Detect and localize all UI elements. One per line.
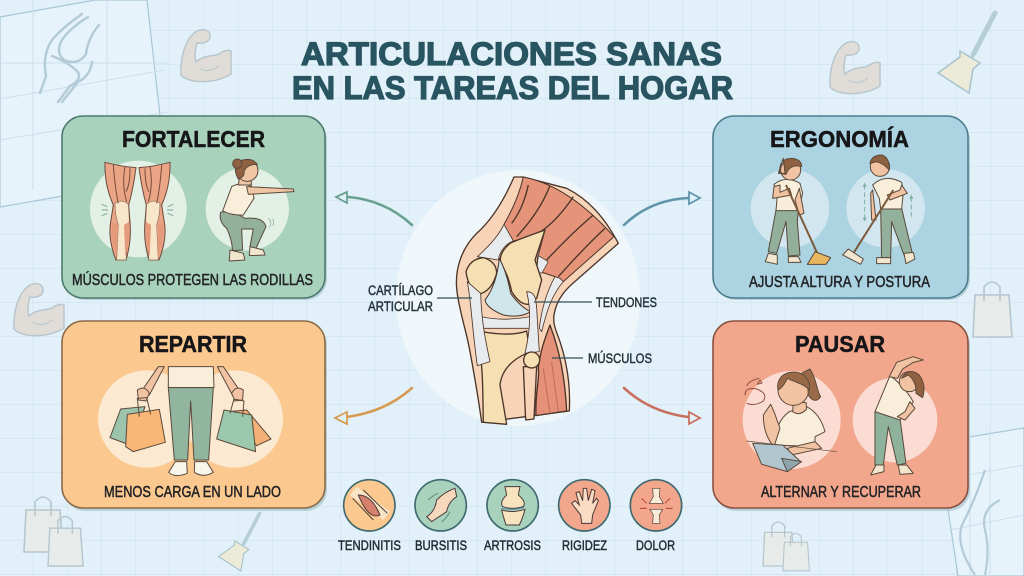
- label: BURSITIS: [415, 538, 467, 553]
- arrow: to fortalecer: [336, 192, 412, 225]
- illustration: person at laptop: [743, 369, 841, 472]
- circle backdrop: [396, 170, 640, 426]
- icon: muscle top right: [830, 42, 880, 94]
- heading: ERGONOMÍA: [770, 125, 909, 152]
- label: RIGIDEZ: [562, 538, 607, 553]
- illustration: squat: [206, 159, 294, 261]
- label: tendones: TENDONES: [596, 295, 657, 310]
- caption: ALTERNAR Y RECUPERAR: [761, 484, 921, 501]
- heading: PAUSAR: [795, 331, 885, 357]
- label: cartilago articular: ARTICULAR: [368, 299, 433, 314]
- icon: tendinitis: [344, 480, 395, 531]
- illustration: person sweeping angled: [843, 155, 925, 264]
- title: EN LAS TAREAS DEL HOGAR: [292, 70, 733, 106]
- caption: MENOS CARGA EN UN LADO: [104, 484, 281, 501]
- label: cartilago articular: [368, 283, 433, 314]
- label: ARTROSIS: [484, 538, 541, 553]
- icon: bags bottom left: [24, 497, 83, 566]
- label: DOLOR: [636, 538, 675, 553]
- panel: ergonomia: [713, 116, 970, 300]
- icon: broom top right: [938, 13, 995, 93]
- arrow: to pausar: [624, 388, 700, 424]
- icon: muscle left: [14, 284, 64, 336]
- card background: [62, 321, 327, 511]
- icon: artrosis: [487, 480, 538, 531]
- title: [292, 36, 733, 106]
- arrow: to repartir: [335, 388, 412, 424]
- label: musculos: MÚSCULOS: [588, 351, 652, 366]
- illustration: person with bags: [98, 367, 283, 476]
- label: cartilago articular: CARTÍLAGO: [368, 283, 433, 298]
- knee anatomy: [456, 177, 618, 424]
- icon: broom bottom left: [219, 513, 260, 571]
- panel: pausar: [713, 321, 970, 511]
- icon: muscle top left: [181, 30, 231, 82]
- icon: bags bottom right: [763, 522, 810, 571]
- panel: fortalecer: [62, 116, 327, 300]
- background sheet: top left: [0, 0, 168, 207]
- leader lines: [437, 298, 592, 358]
- heading: FORTALECER: [122, 126, 265, 152]
- icon: dolor: [630, 480, 682, 531]
- condition icons row: [338, 480, 682, 553]
- arrow: to ergonomia: [624, 192, 700, 225]
- card background: [62, 116, 327, 300]
- caption: MÚSCULOS PROTEGEN LAS RODILLAS: [72, 270, 313, 289]
- icon: bursitis: [415, 480, 466, 531]
- heading: REPARTIR: [139, 331, 247, 357]
- icon: rigidez: [559, 480, 610, 531]
- card background: [713, 321, 970, 511]
- background sheet: bottom right: [938, 428, 1024, 576]
- illustration: leg muscles: [90, 161, 187, 260]
- central knee diagram: [368, 170, 657, 426]
- label: TENDINITIS: [338, 538, 401, 553]
- illustration: person stretching: [853, 357, 937, 475]
- title: ARTICULACIONES SANAS: [301, 36, 722, 72]
- panel: repartir: [62, 321, 327, 511]
- caption: AJUSTA ALTURA Y POSTURA: [749, 274, 930, 291]
- icon: bag right: [973, 282, 1012, 337]
- card background: [713, 116, 970, 300]
- icon: knee sketch top left: [40, 14, 99, 102]
- illustration: person sweeping upright: [751, 158, 831, 264]
